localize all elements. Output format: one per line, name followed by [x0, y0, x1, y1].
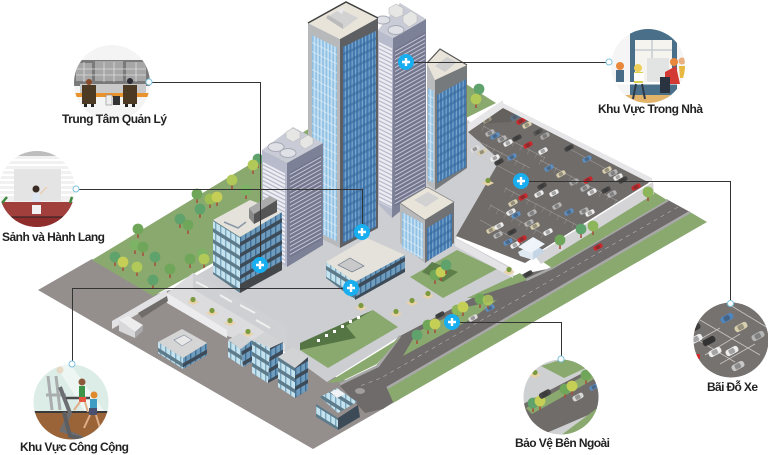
- label: parking: Bãi Đỗ Xe: [707, 379, 758, 394]
- building: lower block C: [252, 332, 283, 383]
- tower: background grey striped: [376, 3, 426, 218]
- callout: perimeter: [515, 356, 610, 450]
- callout: indoor area: [598, 28, 703, 116]
- lawn: right outer road verge: [387, 212, 707, 403]
- marker: perimeter: [444, 314, 460, 330]
- tower: main blue glass: [308, 2, 378, 248]
- wall strip and planters: [167, 273, 287, 351]
- illustration: gym treadmills: [33, 364, 109, 441]
- trees: left lawn: [110, 154, 263, 289]
- building: low plaza pavilion: [326, 238, 405, 300]
- parking walls: [455, 100, 654, 278]
- marker: lobby: [354, 224, 370, 240]
- lawn: strip between parking wall and road: [537, 192, 667, 268]
- label: indoor area: Khu Vực Trong Nhà: [598, 102, 703, 116]
- flags on lawn: [317, 316, 360, 342]
- building: left mid-rise: [213, 196, 282, 293]
- illustration: parking close-up: [694, 302, 768, 378]
- illustration: office team: [610, 28, 687, 104]
- callout: lobby: [0, 151, 105, 244]
- lawn: narrow strip beside plaza: [327, 338, 400, 383]
- trees: back right wedge: [471, 84, 484, 108]
- planters on plaza: [355, 178, 515, 317]
- tower: front striped: [262, 127, 323, 267]
- parking booth: [518, 237, 545, 260]
- plus markers: [252, 54, 529, 330]
- lawn: road median: [403, 300, 497, 356]
- building: bottom block E: [316, 388, 360, 430]
- lawn: plaza upper lawn: [410, 250, 497, 298]
- lawn: large left green area: [92, 128, 330, 296]
- callout: public area: [20, 361, 129, 454]
- connector lines: [72, 62, 730, 364]
- trees: roadside and median: [412, 187, 653, 344]
- marker: control centre: [252, 257, 268, 273]
- building: lower block D: [278, 347, 308, 398]
- lawn: plaza lower lawn: [300, 310, 398, 368]
- label: control centre: Trung Tâm Quản Lý: [62, 112, 167, 126]
- illustration: reception desk: [0, 151, 77, 228]
- tower: right blue glass: [427, 49, 467, 190]
- ground: dark grey base: [38, 259, 400, 449]
- illustration: roadside scene: [524, 360, 598, 434]
- plaza: light grey pavement: [168, 120, 514, 382]
- label: lobby: Sảnh và Hành Lang: [2, 230, 105, 244]
- lawn: back right wedge: [466, 84, 496, 118]
- road cars: [435, 243, 603, 322]
- callout: parking: [694, 300, 768, 391]
- gatehouse: [119, 316, 143, 338]
- parking cars: [470, 113, 641, 249]
- building: small glass near parking: [400, 187, 454, 263]
- label: perimeter: Bảo Vệ Bên Ngoài: [515, 436, 610, 450]
- label: public area: Khu Vực Công Cộng: [20, 440, 129, 454]
- marker: indoor: [398, 54, 414, 70]
- parking lot surface: [456, 108, 652, 263]
- marker: public area: [343, 280, 359, 296]
- marker: parking: [513, 173, 529, 189]
- illustration: monitoring room: [74, 45, 150, 121]
- gate wall: [112, 289, 168, 329]
- callout: control centre: [62, 45, 167, 126]
- building: lower block A: [158, 329, 207, 369]
- parking bay lines: [465, 126, 630, 250]
- building: lower block B: [228, 333, 252, 367]
- road: main road with curb: [340, 200, 690, 413]
